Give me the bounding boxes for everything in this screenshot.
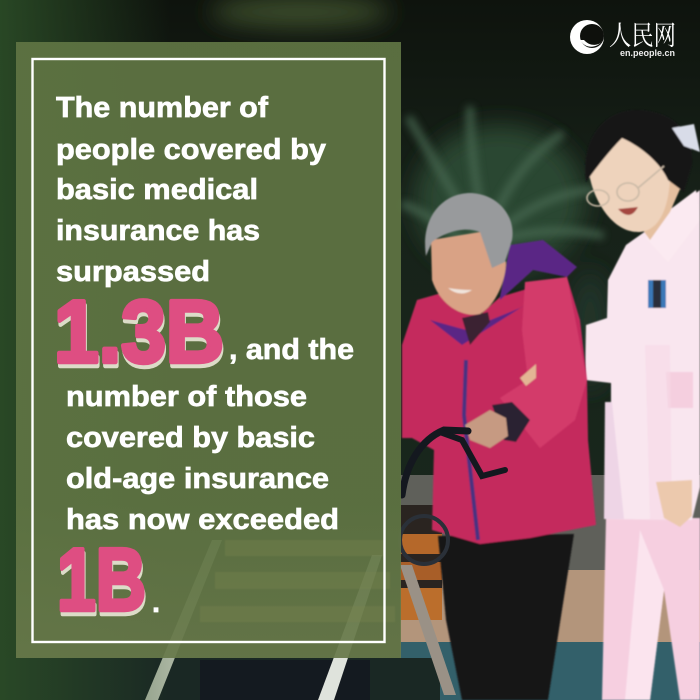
glasses [587,166,664,206]
logo url: en.people.cn [620,48,675,58]
text block: statement: people covered by [56,134,326,166]
coat [585,190,700,520]
chair ghost in panel [200,540,395,622]
trousers [602,518,700,700]
hair [585,110,692,192]
text block: statement: insurance has [56,215,260,247]
inner frame [32,59,384,642]
logo wordmark: 人民网 [609,21,676,51]
text block: statement: The number of [56,92,268,124]
ground and pavement [400,475,700,570]
hood [500,240,577,300]
zip [464,360,478,540]
logo: People's Daily Online [570,20,676,58]
text block: statement: covered by basic [66,422,315,454]
walker [400,430,505,564]
jacket [402,277,596,544]
big number: 1.3B: 1.3B [55,286,225,385]
text block: statement: basic medical [56,174,258,206]
hand [656,480,692,527]
big number: 1B: 1B [58,534,147,633]
logo icon [570,20,604,54]
face [431,232,506,315]
pens [648,280,666,308]
collar [430,305,525,345]
hair clip [672,124,700,152]
neck [462,312,490,345]
trousers [438,534,574,700]
hand on walker [465,410,508,448]
smile [618,207,638,215]
left green fade [0,0,170,700]
text block: statement: old-age insurance [66,463,329,495]
hair [425,193,513,268]
panel: translucent green [16,42,401,658]
text block: statement [54,92,354,633]
bench [400,505,442,620]
mouth [448,288,472,294]
foliage fronds [405,110,600,245]
person: elderly woman [402,193,596,700]
text block: statement: has now exceeded [66,504,339,536]
collar [646,190,700,262]
big number: 1B: 1B [57,530,146,629]
big number: 1.3B: 1.3B [54,282,224,381]
sleeve [500,277,587,448]
cuff [492,402,530,442]
nurse fingers [520,364,536,386]
text block: statement: surpassed [56,256,210,288]
text block: statement: number of those [66,381,307,413]
person: nurse [585,110,700,700]
text block: statement: , and the [229,334,354,366]
neck and face [640,180,684,240]
text block: statement: . [152,587,160,619]
